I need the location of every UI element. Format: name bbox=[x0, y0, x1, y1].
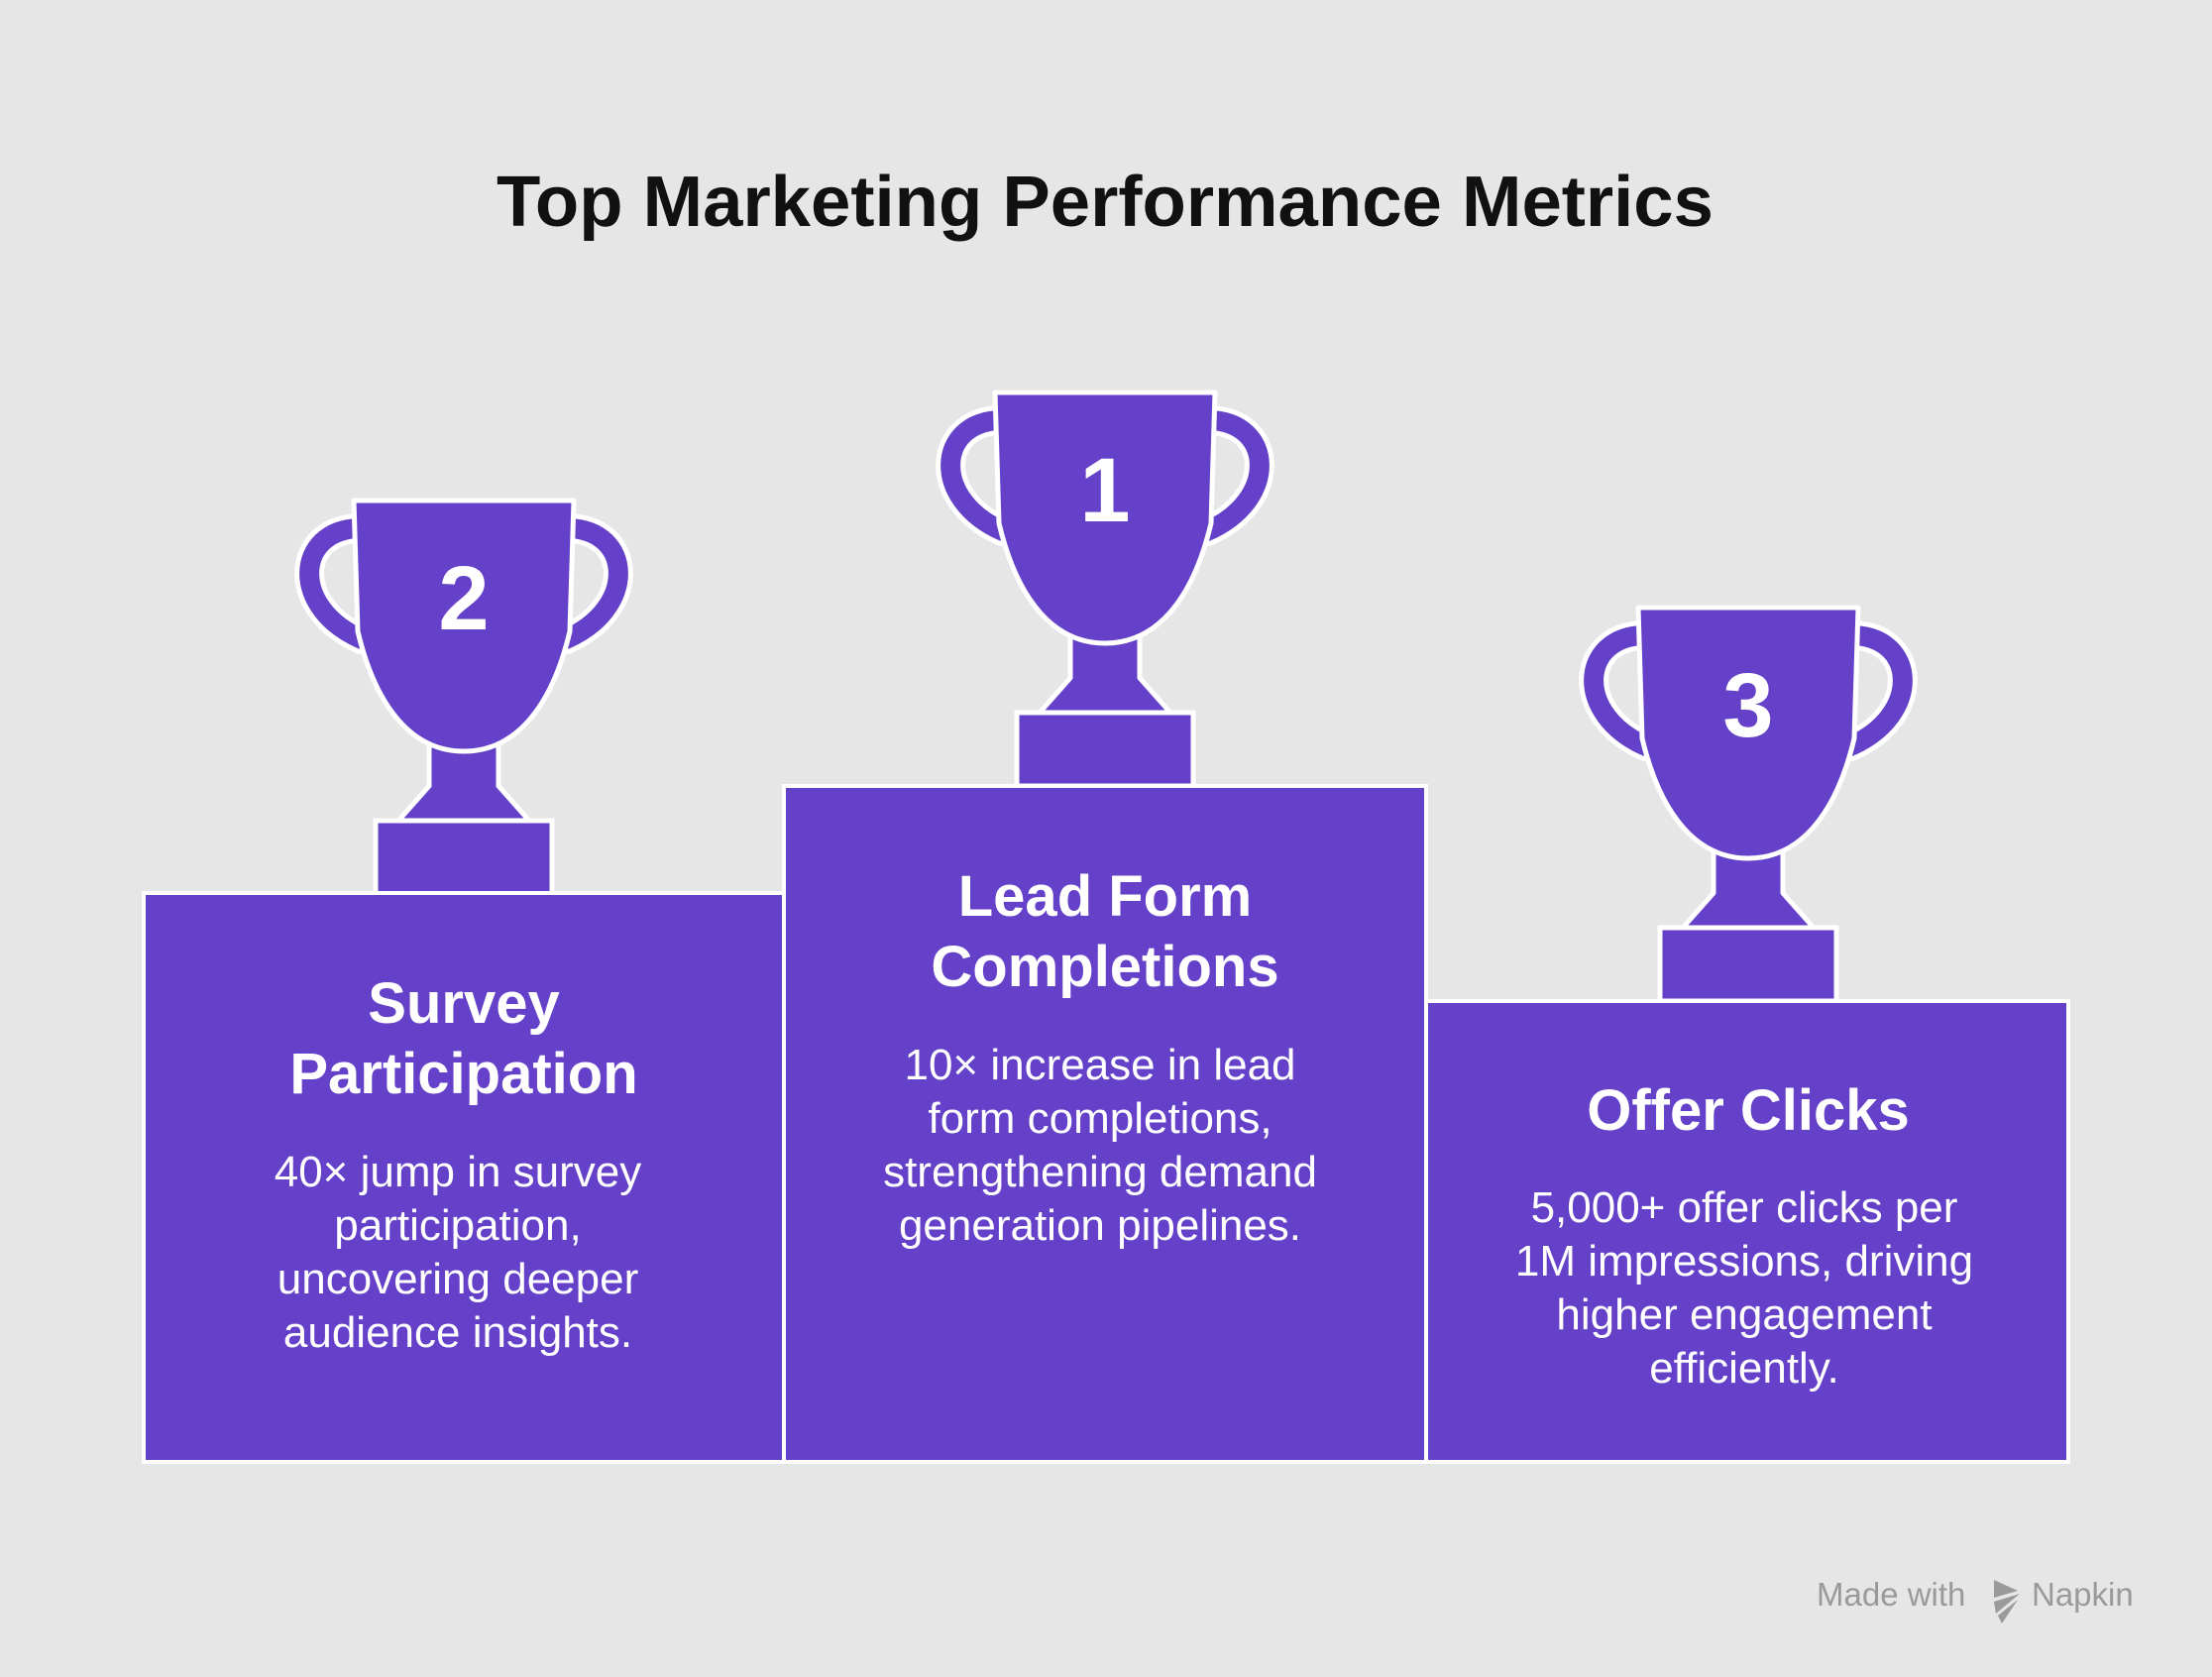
body: offer clicks: 1M impressions, driving bbox=[1515, 1237, 1973, 1286]
body: lead form: 10× increase in lead bbox=[904, 1041, 1296, 1089]
trophy 2 bbox=[309, 501, 618, 894]
body: lead form: form completions, bbox=[928, 1094, 1272, 1143]
panel: lead form completions bbox=[784, 786, 1426, 1462]
body: offer clicks: 5,000+ offer clicks per bbox=[1531, 1183, 1957, 1232]
panel: survey participation bbox=[144, 893, 784, 1462]
footer: made with napkin bbox=[1817, 1576, 2134, 1623]
heading: lead form completions: Completions bbox=[931, 935, 1279, 999]
trophy 3: 3 bbox=[1722, 655, 1774, 756]
icon: napkin logo bbox=[1994, 1580, 2020, 1623]
body: lead form: generation pipelines. bbox=[899, 1201, 1301, 1250]
body: survey: uncovering deeper bbox=[277, 1255, 638, 1303]
body: survey: participation, bbox=[334, 1201, 582, 1250]
trophy 1: 1 bbox=[1079, 440, 1131, 541]
heading: survey participation: Participation bbox=[289, 1042, 638, 1106]
body: survey: audience insights. bbox=[283, 1308, 632, 1357]
panel: offer clicks bbox=[1426, 1001, 2068, 1462]
body: offer clicks: efficiently. bbox=[1649, 1344, 1839, 1393]
trophy 1 bbox=[950, 392, 1260, 786]
trophy 2: 2 bbox=[438, 548, 490, 649]
footer: made with napkin: Napkin bbox=[2032, 1576, 2134, 1613]
body: offer clicks: higher engagement bbox=[1556, 1290, 1933, 1339]
heading: survey participation: Survey bbox=[368, 971, 560, 1036]
body: lead form: strengthening demand bbox=[883, 1148, 1317, 1196]
heading: offer clicks: Offer Clicks bbox=[1587, 1078, 1910, 1143]
heading: lead form completions: Lead Form bbox=[958, 864, 1252, 929]
title: Top Marketing Performance Metrics bbox=[497, 163, 1714, 242]
body: survey: 40× jump in survey bbox=[275, 1148, 641, 1196]
footer: made with napkin: Made with bbox=[1817, 1576, 1965, 1613]
trophy 3 bbox=[1594, 608, 1903, 1001]
